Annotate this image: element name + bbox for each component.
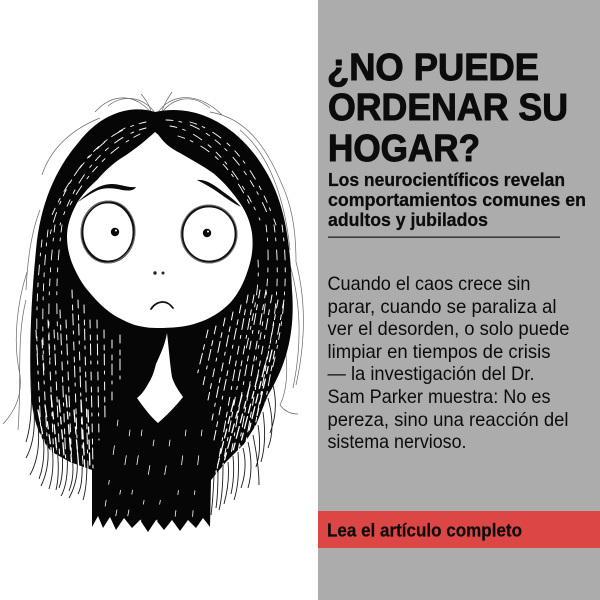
- body text: [328, 273, 570, 453]
- subtitle: Los neurocientíficos revelan: [328, 170, 565, 190]
- call to action bar: Lea el artículo completo: [327, 520, 522, 540]
- frowning mouth: [151, 302, 173, 309]
- subtitle: [328, 170, 586, 230]
- title: ¿NO PUEDE: [327, 47, 539, 89]
- left eyebrow: [78, 184, 136, 202]
- body text: Sam Parker muestra: No es: [328, 386, 551, 408]
- title: HOGAR?: [328, 128, 480, 170]
- divider line: [328, 236, 560, 238]
- illustration: worried girl with long black hair: [3, 92, 304, 532]
- body text: Cuando el caos crece sin: [328, 273, 530, 295]
- body text: limpiar en tiempos de crisis: [328, 341, 551, 363]
- body text: pereza, sino una reacción del: [328, 409, 568, 431]
- face: [67, 132, 253, 328]
- right eye: [177, 201, 241, 267]
- call to action bar: [318, 511, 600, 548]
- hair texture: light streaks upper: [36, 120, 285, 527]
- body text: — la investigación del Dr.: [328, 363, 534, 385]
- hair texture: right side streaks: [196, 290, 284, 475]
- left eye: [78, 198, 138, 266]
- nose: [153, 271, 164, 275]
- body text: ver el desorden, o solo puede: [328, 318, 570, 340]
- body text: parar, cuando se paraliza al: [328, 296, 556, 318]
- hair fringe strands: [26, 380, 275, 515]
- title: ORDENAR SU: [328, 87, 568, 129]
- body text: sistema nervioso.: [328, 431, 466, 453]
- subtitle: adultos y jubilados: [328, 210, 488, 230]
- subtitle: comportamientos comunes en: [328, 190, 586, 210]
- right grey panel: [318, 0, 600, 600]
- right eyebrow: [197, 180, 241, 207]
- neck and chest: [137, 333, 183, 423]
- hair silhouette: [30, 109, 293, 532]
- hair texture: left side streaks: [36, 290, 120, 472]
- title: [327, 47, 568, 170]
- flyaway hair strands: [3, 92, 304, 430]
- hair texture: dress streaks: [102, 420, 202, 527]
